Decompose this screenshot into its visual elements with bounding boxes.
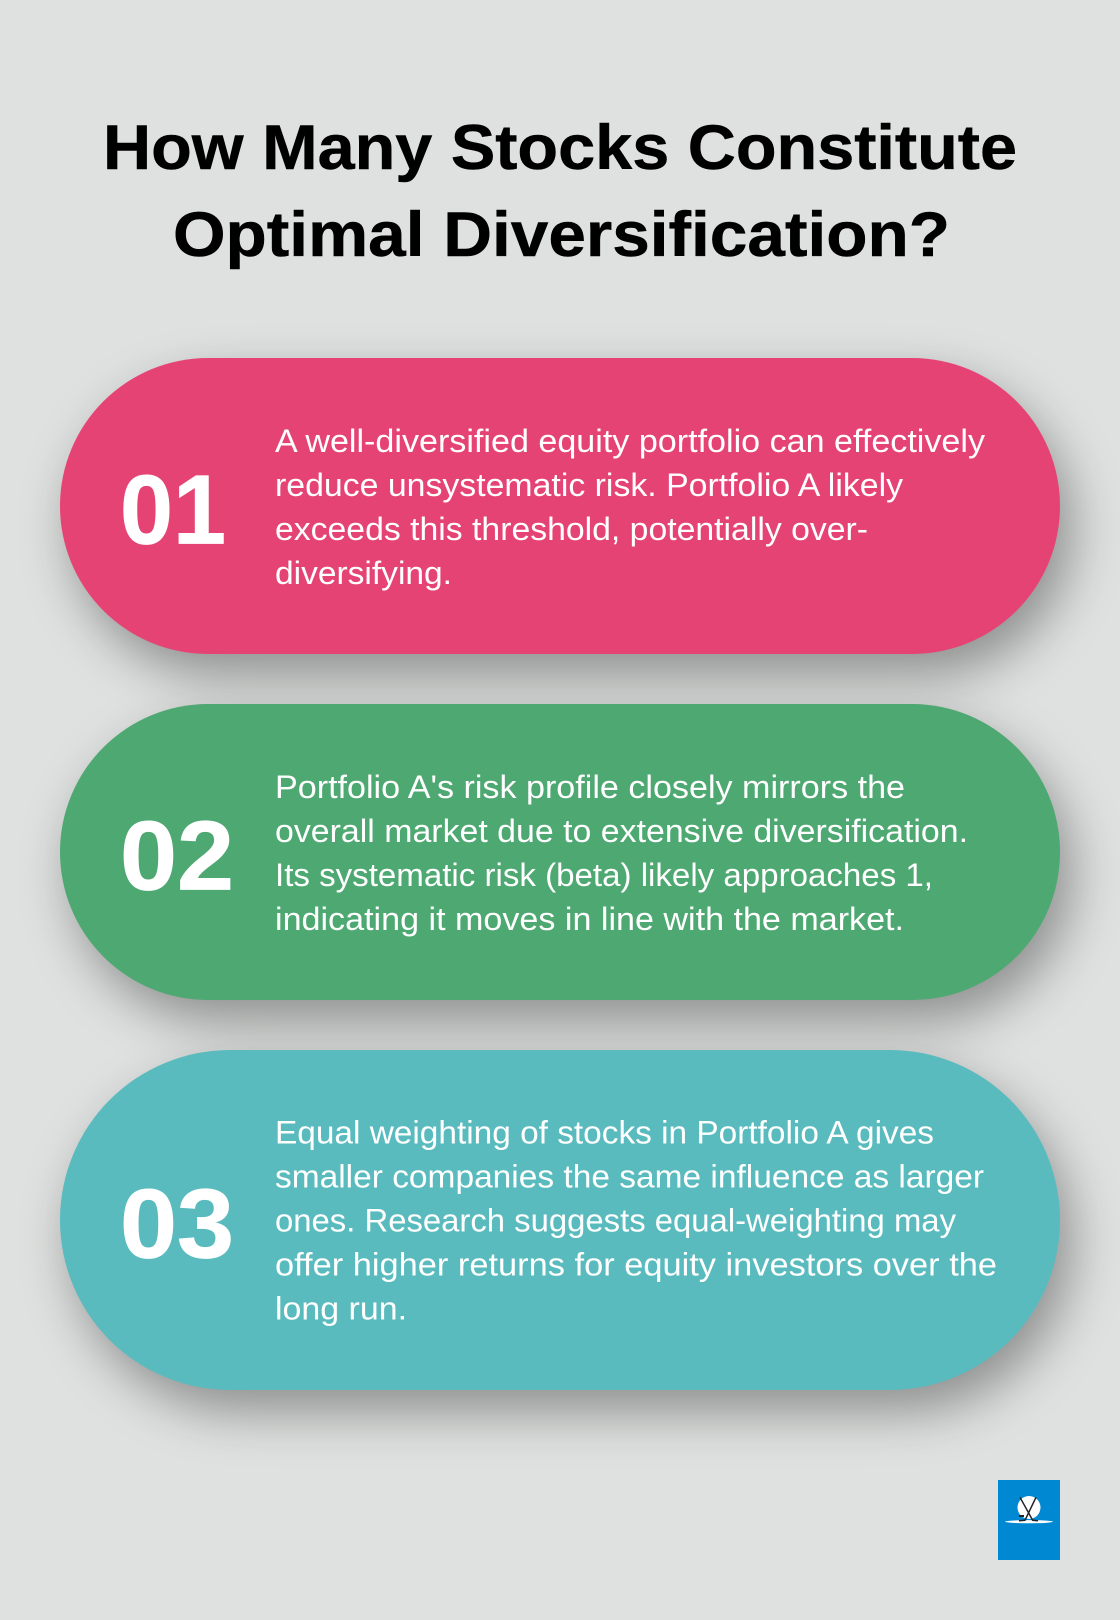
text: point 1: A well-diversified equity portfolio can effectively [275, 423, 985, 459]
text: point 3: ones. Research suggests equal-weighting may [275, 1202, 956, 1238]
panel: 01 [60, 358, 1060, 654]
number 02: 02 [120, 800, 234, 910]
title: How Many Stocks Constitute [103, 113, 1017, 183]
text: point 3: offer higher returns for equity investors over the [275, 1246, 997, 1282]
text: point 2: Its systematic risk (beta) likely approaches 1, [275, 857, 933, 893]
text: point 2: overall market due to extensive diversification. [275, 813, 968, 849]
number 03: 03 [120, 1168, 234, 1278]
text: point 3: smaller companies the same influence as larger [275, 1158, 984, 1194]
text: point 2: Portfolio A's risk profile closely mirrors the [275, 769, 905, 805]
text: point 3 [275, 1114, 997, 1326]
text: point 1: reduce unsystematic risk. Portfolio A likely [275, 467, 903, 503]
title [103, 113, 1017, 270]
logo: hockey sticks badge [998, 1480, 1060, 1560]
panel: 03 [60, 1050, 1060, 1390]
panel: 02 [60, 704, 1060, 1000]
text: point 2: indicating it moves in line with the market. [275, 901, 904, 937]
text: point 1 [275, 423, 985, 591]
number 01: 01 [120, 454, 226, 564]
title: Optimal Diversification? [173, 200, 950, 270]
text: point 3: long run. [275, 1290, 407, 1326]
text: point 1: diversifying. [275, 555, 452, 591]
text: point 2 [275, 769, 968, 937]
text: point 3: Equal weighting of stocks in Portfolio A gives [275, 1114, 934, 1150]
text: point 1: exceeds this threshold, potentially over- [275, 511, 868, 547]
